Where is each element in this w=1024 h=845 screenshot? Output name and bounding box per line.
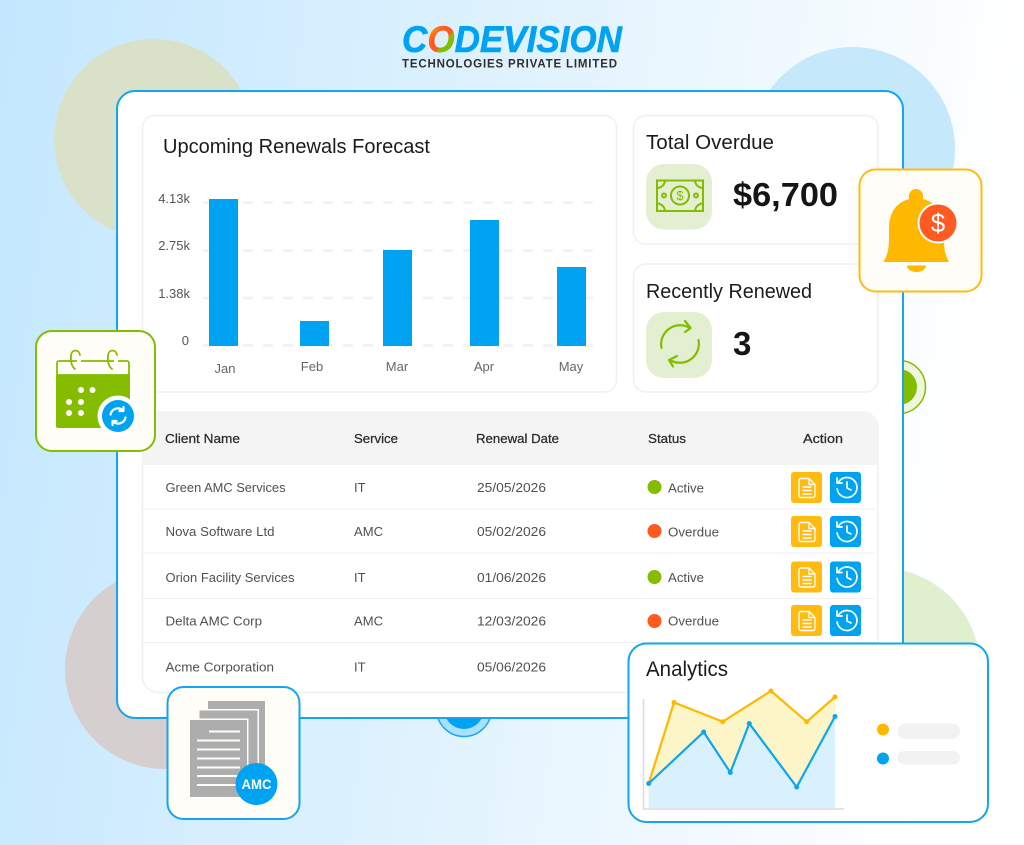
- panel: total overdue: $6,700: [733, 176, 838, 213]
- table header: Action: [803, 431, 843, 446]
- table rows: AMC: [354, 524, 383, 539]
- table rows: Overdue: [668, 524, 719, 540]
- bar chart: 2.75k: [158, 238, 190, 253]
- table rows: [166, 480, 719, 674]
- table rows: Nova Software Ltd: [166, 524, 274, 539]
- icon: AMC badge: AMC: [242, 776, 272, 792]
- floating card: calendar renewal: [36, 331, 155, 451]
- bar chart: May: [559, 359, 584, 374]
- table header: Service: [354, 431, 398, 446]
- bar chart: Mar: [386, 359, 409, 374]
- analytics heading: Analytics: [646, 658, 728, 681]
- chart legend: [877, 724, 960, 764]
- floating card: AMC documents: [168, 687, 300, 819]
- icon: calendar: [56, 350, 130, 428]
- table rows: Orion Facility Services: [166, 570, 295, 585]
- icon: dollar badge: $: [931, 208, 946, 238]
- icon: renew arrows: [646, 312, 712, 378]
- icon: banknote: $: [676, 188, 684, 203]
- bar chart: 4.13k: [158, 191, 190, 206]
- floating card: overdue bell: [860, 170, 982, 292]
- panel: total overdue: Total Overdue: [646, 132, 774, 154]
- table rows: 01/06/2026: [477, 570, 546, 585]
- panel: recently renewed: [634, 264, 878, 392]
- panel: recently renewed: Recently Renewed: [646, 281, 812, 303]
- bar chart: [158, 191, 599, 376]
- table rows: Overdue: [668, 614, 719, 628]
- main dashboard panel: [117, 91, 903, 718]
- table header: Client Name: [165, 431, 240, 446]
- table rows: 25/05/2026: [477, 480, 546, 495]
- table rows: 05/02/2026: [477, 524, 546, 539]
- table rows: AMC: [354, 614, 383, 628]
- table rows: Active: [668, 480, 704, 496]
- floating card: analytics: [628, 644, 988, 822]
- table rows: 05/06/2026: [477, 660, 546, 674]
- panel: total overdue: [634, 116, 878, 244]
- table rows: 12/03/2026: [477, 614, 546, 628]
- bar chart: Feb: [301, 359, 323, 374]
- action buttons: [791, 472, 861, 636]
- table rows: Delta AMC Corp: [166, 614, 262, 628]
- panel: recently renewed: 3: [733, 325, 751, 362]
- status dots: [648, 480, 662, 628]
- table rows: IT: [354, 480, 366, 495]
- panel: upcoming renewals forecast: [142, 116, 616, 392]
- table header: [142, 412, 878, 465]
- table rows: Active: [668, 570, 704, 585]
- bar chart: 1.38k: [158, 286, 190, 301]
- bar chart: Jan: [215, 361, 235, 376]
- table rows: IT: [354, 570, 366, 585]
- bar chart: 0: [182, 333, 189, 348]
- renewals table: [142, 412, 878, 692]
- table rows: IT: [354, 660, 366, 674]
- table rows: Acme Corporation: [166, 660, 274, 674]
- icon: bell: [884, 189, 949, 262]
- table header: Status: [648, 431, 687, 446]
- icon: bell clapper: [907, 266, 926, 272]
- logo: TECHNOLOGIES PRIVATE LIMITED: [402, 58, 617, 70]
- icon: sync badge: [98, 396, 138, 436]
- chart heading: Upcoming Renewals Forecast: [163, 136, 430, 158]
- icon: document stack: [188, 701, 265, 798]
- logo: CODEVISION: [402, 19, 623, 60]
- table rows: Green AMC Services: [166, 480, 286, 495]
- icon: banknote: [646, 164, 712, 230]
- bar chart: Apr: [474, 359, 495, 374]
- line chart: [644, 688, 844, 809]
- table header: Renewal Date: [476, 431, 559, 446]
